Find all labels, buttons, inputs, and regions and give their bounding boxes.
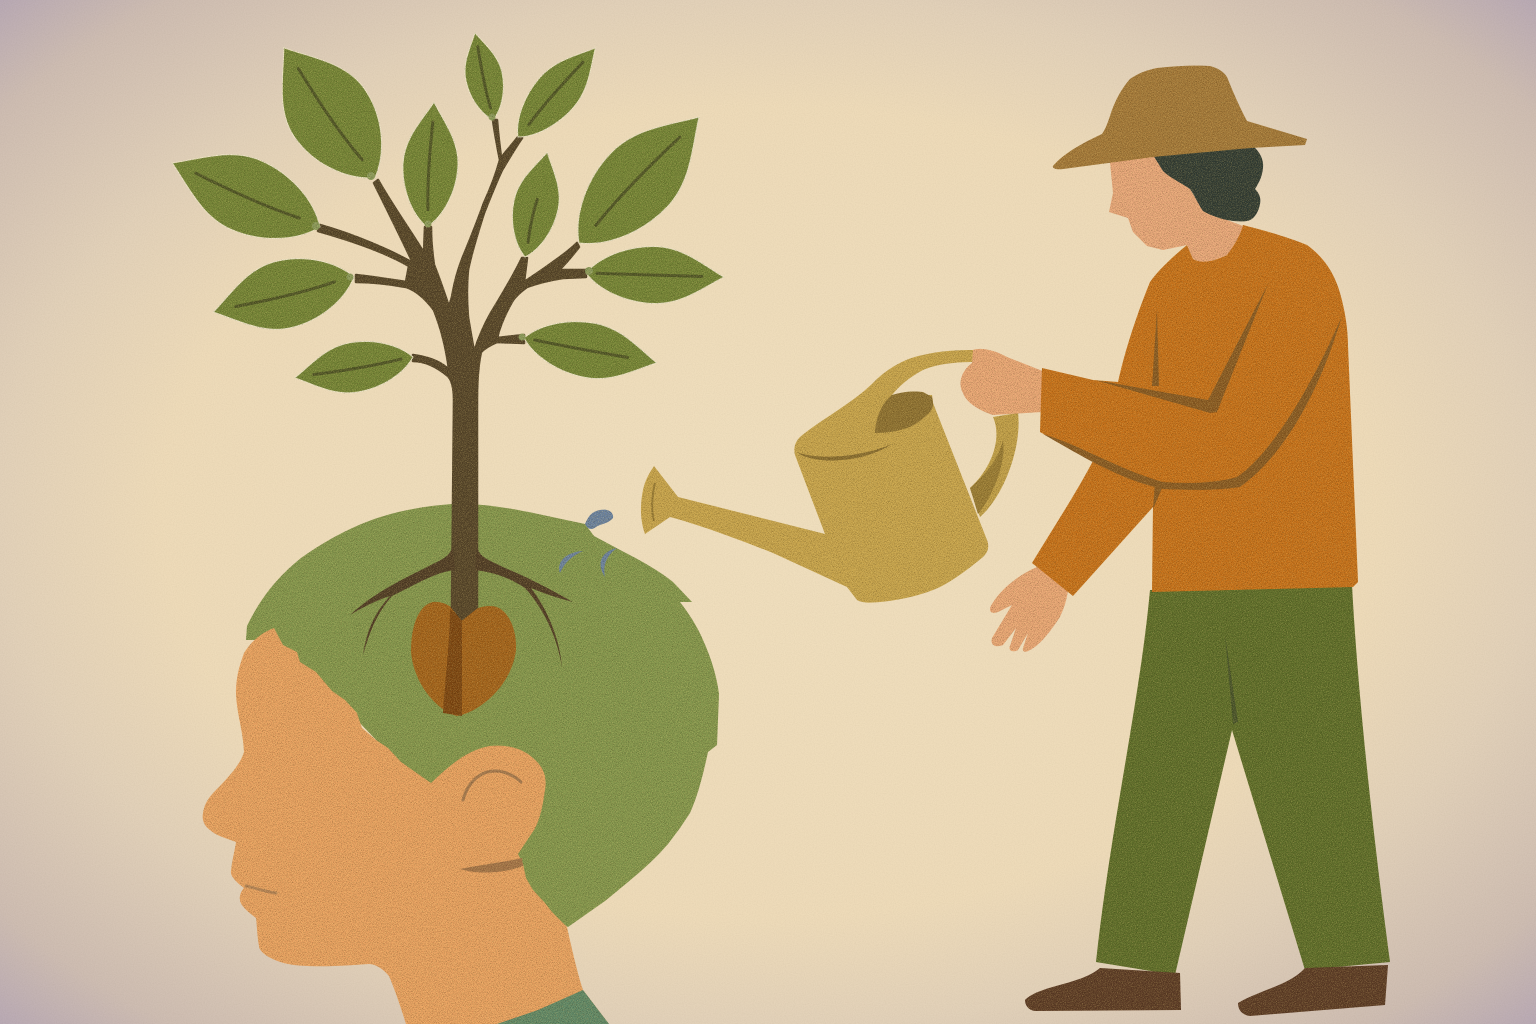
leaves bbox=[157, 23, 727, 402]
can opening bbox=[875, 391, 933, 433]
hat bbox=[1053, 66, 1307, 169]
pants bbox=[1096, 585, 1390, 975]
rear handle shadow bbox=[970, 440, 1004, 514]
face and neck bbox=[1109, 150, 1243, 262]
sweater folds bbox=[1043, 284, 1342, 509]
leaf 8 bbox=[205, 244, 362, 345]
face, neck and ear bbox=[203, 628, 609, 1024]
collar bbox=[497, 990, 609, 1024]
can body, spout and top handle bbox=[641, 350, 988, 603]
tree trunk and branches bbox=[318, 120, 586, 619]
illustration bbox=[157, 23, 1390, 1024]
sweater bbox=[1032, 225, 1358, 596]
hair bbox=[1153, 146, 1263, 221]
open hand bbox=[990, 567, 1068, 652]
head with green hair bbox=[203, 504, 719, 1024]
leaf 11 bbox=[519, 311, 662, 390]
leaf 6 bbox=[503, 148, 569, 262]
left shoe bbox=[1025, 968, 1181, 1011]
leaf 4 bbox=[457, 29, 511, 124]
ear line bbox=[463, 771, 521, 800]
hair: soil top of head bbox=[246, 504, 719, 927]
water drops bbox=[559, 510, 617, 577]
leaf base nubs bbox=[312, 114, 593, 340]
seed bbox=[411, 602, 516, 716]
roots bbox=[350, 545, 573, 668]
gardener bbox=[960, 66, 1390, 1016]
leaf 2 bbox=[157, 129, 335, 261]
hand on handle bbox=[960, 349, 1045, 415]
leaf 3 bbox=[400, 101, 461, 229]
jaw fold bbox=[460, 858, 523, 873]
rear handle bbox=[970, 413, 1019, 517]
pants crease bbox=[1225, 635, 1238, 724]
can rim line bbox=[797, 444, 892, 461]
leaf 10 bbox=[290, 332, 417, 402]
mouth bbox=[246, 886, 276, 893]
leaf 5 bbox=[501, 33, 612, 152]
leaf 7 bbox=[551, 90, 727, 270]
leaf 9 bbox=[585, 245, 725, 306]
leaf 1 bbox=[249, 23, 410, 202]
spout rose line bbox=[652, 483, 655, 521]
watering can bbox=[641, 350, 1019, 603]
right shoe bbox=[1238, 965, 1388, 1016]
